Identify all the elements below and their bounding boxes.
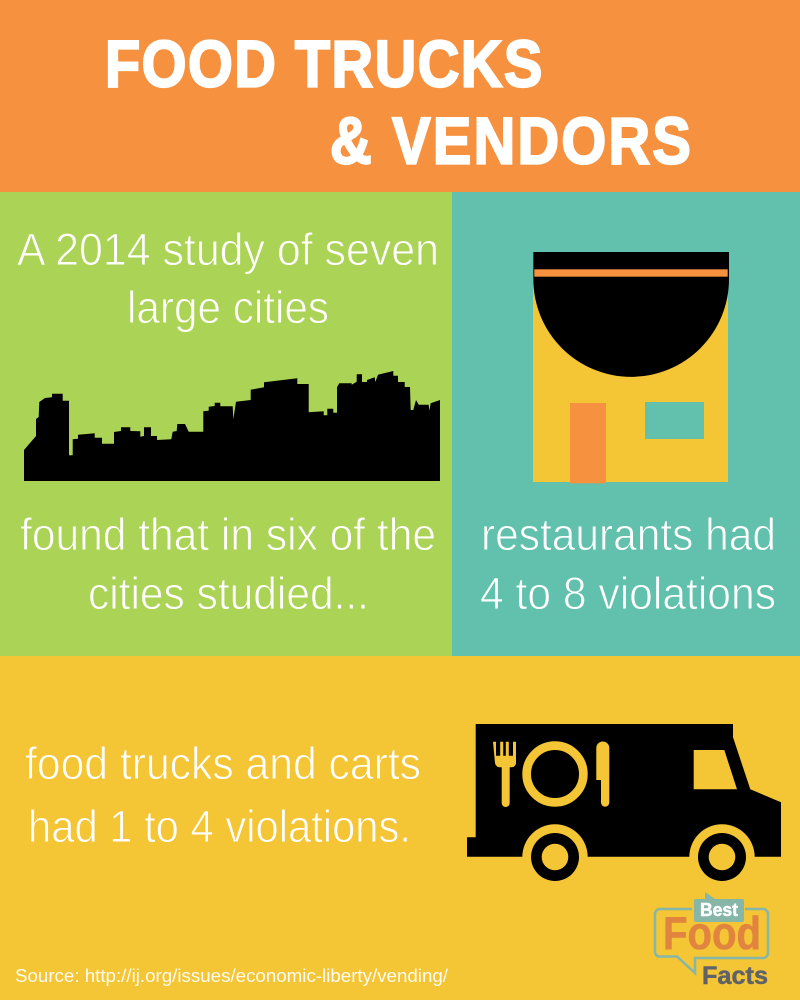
icon: city skyline [24,371,440,481]
icon: restaurant building [533,252,729,483]
panel: title header [0,0,800,192]
text: study intro: large cities [127,282,329,333]
text: food truck violations: food trucks and carts [25,738,421,789]
panel: study of seven cities [0,192,452,656]
source line: Source: http://ij.org/issues/economic-liberty/vending/ [15,966,448,986]
text: finding in six cities [20,509,436,619]
text: restaurant violations: restaurants had [481,509,776,560]
text: finding in six cities: cities studied... [88,568,369,619]
logo: Best Food Facts: Best [700,900,738,920]
text: restaurant violations [480,509,776,619]
panel: restaurants [452,192,800,656]
text: finding in six cities: found that in six of the [20,509,436,560]
logo: Best Food Facts: Food [663,907,761,959]
heading: food trucks and vendors: FOOD TRUCKS [105,28,542,101]
text: restaurant violations: 4 to 8 violations [480,568,776,619]
logo: Best Food Facts [655,892,768,990]
panel: food trucks [0,656,800,1000]
icon: food truck [467,724,781,881]
text: food truck violations: had 1 to 4 violations. [28,801,411,852]
text: study intro [17,224,439,333]
text: food truck violations [25,738,421,852]
logo: Best Food Facts: Facts [702,962,768,990]
heading: food trucks and vendors [105,28,691,178]
heading: food trucks and vendors: & VENDORS [330,105,691,178]
text: study intro: A 2014 study of seven [17,224,439,275]
